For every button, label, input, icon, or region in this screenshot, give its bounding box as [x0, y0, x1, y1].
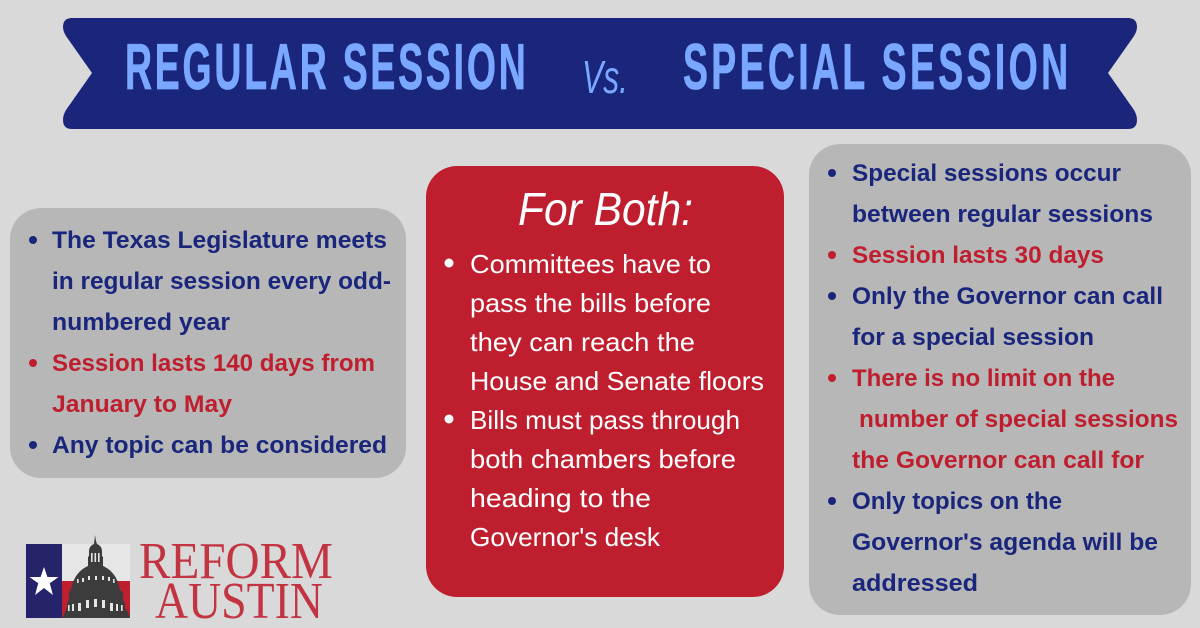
icon: texas flag with capitol dome: [26, 535, 130, 618]
bullet: both chambers: Bills must pass through: [470, 405, 740, 435]
bullet: agenda topics: [828, 488, 1158, 597]
bullet: both chambers: [444, 405, 740, 552]
title banner: [63, 18, 1137, 129]
logo: reform austin: [26, 533, 333, 628]
logo wordmark: REFORM: [139, 533, 333, 590]
bullet: timing: between regular sessions: [852, 201, 1153, 228]
bullet: timing: Special sessions occur: [852, 160, 1121, 187]
bullet: no limit: number of special sessions: [859, 406, 1178, 433]
bullet: both chambers: Governor's desk: [470, 522, 661, 552]
heading: regular session: REGULAR SESSION: [125, 32, 526, 104]
bullet: both chambers: heading to the: [470, 483, 651, 513]
bullet: topics: Any topic can be considered: [52, 432, 387, 459]
bullet: timing: [828, 160, 1153, 228]
bullet: committees: [444, 249, 764, 396]
bullet: committees: House and Senate floors: [470, 366, 764, 396]
bullet: committees: they can reach the: [470, 327, 695, 357]
bullet: who can call: Only the Governor can call: [852, 283, 1163, 310]
bullet: session length: January to May: [52, 391, 233, 418]
bullet: agenda topics: addressed: [852, 570, 978, 597]
bullet: session length: Session lasts 140 days from: [52, 350, 375, 377]
heading: special session: SPECIAL SESSION: [683, 32, 1068, 104]
bullet: committees: pass the bills before: [470, 288, 711, 318]
panel: regular session: [10, 208, 406, 478]
bullet: agenda topics: Only topics on the: [852, 488, 1062, 515]
bullet: no limit: [828, 365, 1178, 474]
bullet: meeting schedule: [29, 227, 391, 336]
bullet: no limit: the Governor can call for: [852, 447, 1144, 474]
bullet: meeting schedule: in regular session every odd-: [52, 268, 391, 295]
bullet: who can call: [828, 283, 1163, 351]
bullet: both chambers: both chambers before: [470, 444, 736, 474]
bullet: no limit: There is no limit on the: [852, 365, 1115, 392]
heading: vs: Vs.: [582, 51, 628, 103]
panel: for both: [426, 166, 784, 597]
bullet: committees: Committees have to: [470, 249, 711, 279]
bullet: session length: [29, 350, 375, 418]
bullet: meeting schedule: numbered year: [52, 309, 230, 336]
bullet: meeting schedule: The Texas Legislature meets: [52, 227, 387, 254]
panel heading: for both: For Both:: [518, 183, 693, 235]
bullet: agenda topics: Governor's agenda will be: [852, 529, 1158, 556]
panel: special session: [809, 144, 1191, 615]
bullet: who can call: for a special session: [852, 324, 1094, 351]
bullet: session length: Session lasts 30 days: [852, 242, 1104, 269]
